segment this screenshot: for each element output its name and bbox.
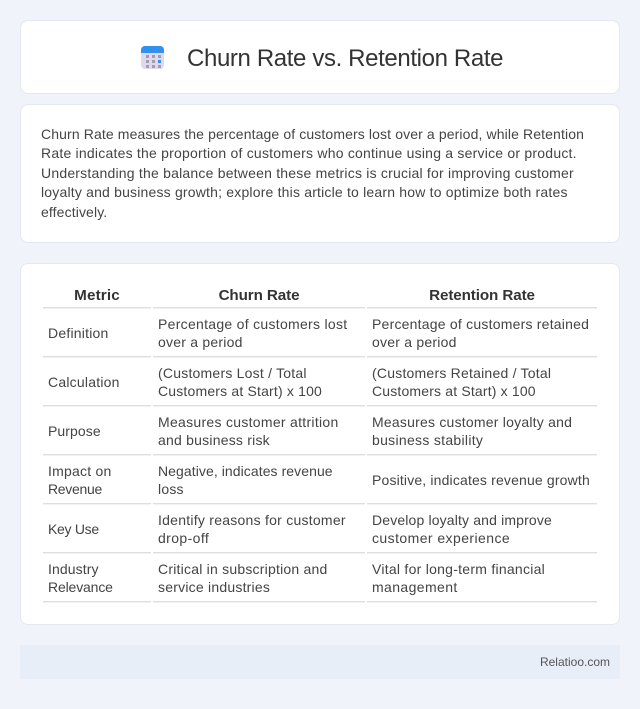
row: industry relevance	[48, 561, 545, 595]
row: purpose: business stability	[372, 432, 483, 448]
row: calculation: (Customers Retained / Total	[372, 365, 551, 381]
intro text: effectively.	[41, 204, 107, 220]
row: industry relevance: service industries	[158, 579, 270, 595]
panel: comparison table	[20, 263, 620, 625]
footer	[20, 645, 620, 679]
intro text: Rate indicates the proportion of customers who continue using a service or product.	[41, 145, 577, 161]
row: purpose: Purpose	[48, 423, 101, 439]
row: purpose: Measures customer loyalty and	[372, 414, 572, 430]
row: key use: customer experience	[372, 530, 510, 546]
row: key use: drop-off	[158, 530, 209, 546]
row: calculation	[48, 365, 551, 399]
comparison table	[43, 287, 597, 603]
intro text: Understanding the balance between these metrics is crucial for improving customer	[41, 164, 574, 180]
row: key use: Identify reasons for customer	[158, 512, 346, 528]
row: industry relevance: management	[372, 579, 458, 595]
table header: Churn Rate	[219, 287, 299, 304]
row: impact on revenue	[48, 463, 590, 497]
intro text: loyalty and business growth; explore this article to learn how to optimize both rates	[41, 184, 568, 200]
row: impact on revenue: Revenue	[48, 481, 102, 497]
footer brand: Relatioo.com	[540, 655, 610, 669]
row: key use: Key Use	[48, 521, 99, 537]
intro text: Churn Rate measures the percentage of customers lost over a period, while Retention	[41, 126, 584, 142]
row: industry relevance: Vital for long-term financial	[372, 561, 545, 577]
row: definition: over a period	[158, 334, 243, 350]
row: impact on revenue: Impact on	[48, 463, 111, 479]
row: industry relevance: Critical in subscription and	[158, 561, 328, 577]
row: calculation: Calculation	[48, 374, 120, 390]
row: purpose	[48, 414, 572, 448]
row: calculation: Customers at Start) x 100	[372, 383, 536, 399]
row: calculation: (Customers Lost / Total	[158, 365, 307, 381]
row: definition: Percentage of customers lost	[158, 316, 347, 332]
row: definition: Definition	[48, 325, 109, 341]
row: purpose: and business risk	[158, 432, 270, 448]
row: industry relevance: Relevance	[48, 579, 113, 595]
table header: Metric	[74, 287, 120, 304]
panel: introduction	[20, 104, 620, 243]
title card	[20, 20, 620, 94]
row: definition: Percentage of customers retained	[372, 316, 589, 332]
row: impact on revenue: Negative, indicates revenue	[158, 463, 333, 479]
row: purpose: Measures customer attrition	[158, 414, 339, 430]
row: definition	[48, 316, 589, 350]
table header	[74, 287, 535, 304]
row: industry relevance: Industry	[48, 561, 99, 577]
icon: calendar	[141, 46, 164, 69]
intro text	[41, 126, 584, 220]
title: Churn Rate vs. Retention Rate	[187, 45, 503, 72]
row: impact on revenue: loss	[158, 481, 184, 497]
row: definition: over a period	[372, 334, 457, 350]
row: impact on revenue: Positive, indicates revenue growth	[372, 472, 590, 488]
row: key use: Develop loyalty and improve	[372, 512, 552, 528]
row: calculation: Customers at Start) x 100	[158, 383, 322, 399]
row: key use	[48, 512, 552, 546]
table header: Retention Rate	[429, 287, 535, 304]
